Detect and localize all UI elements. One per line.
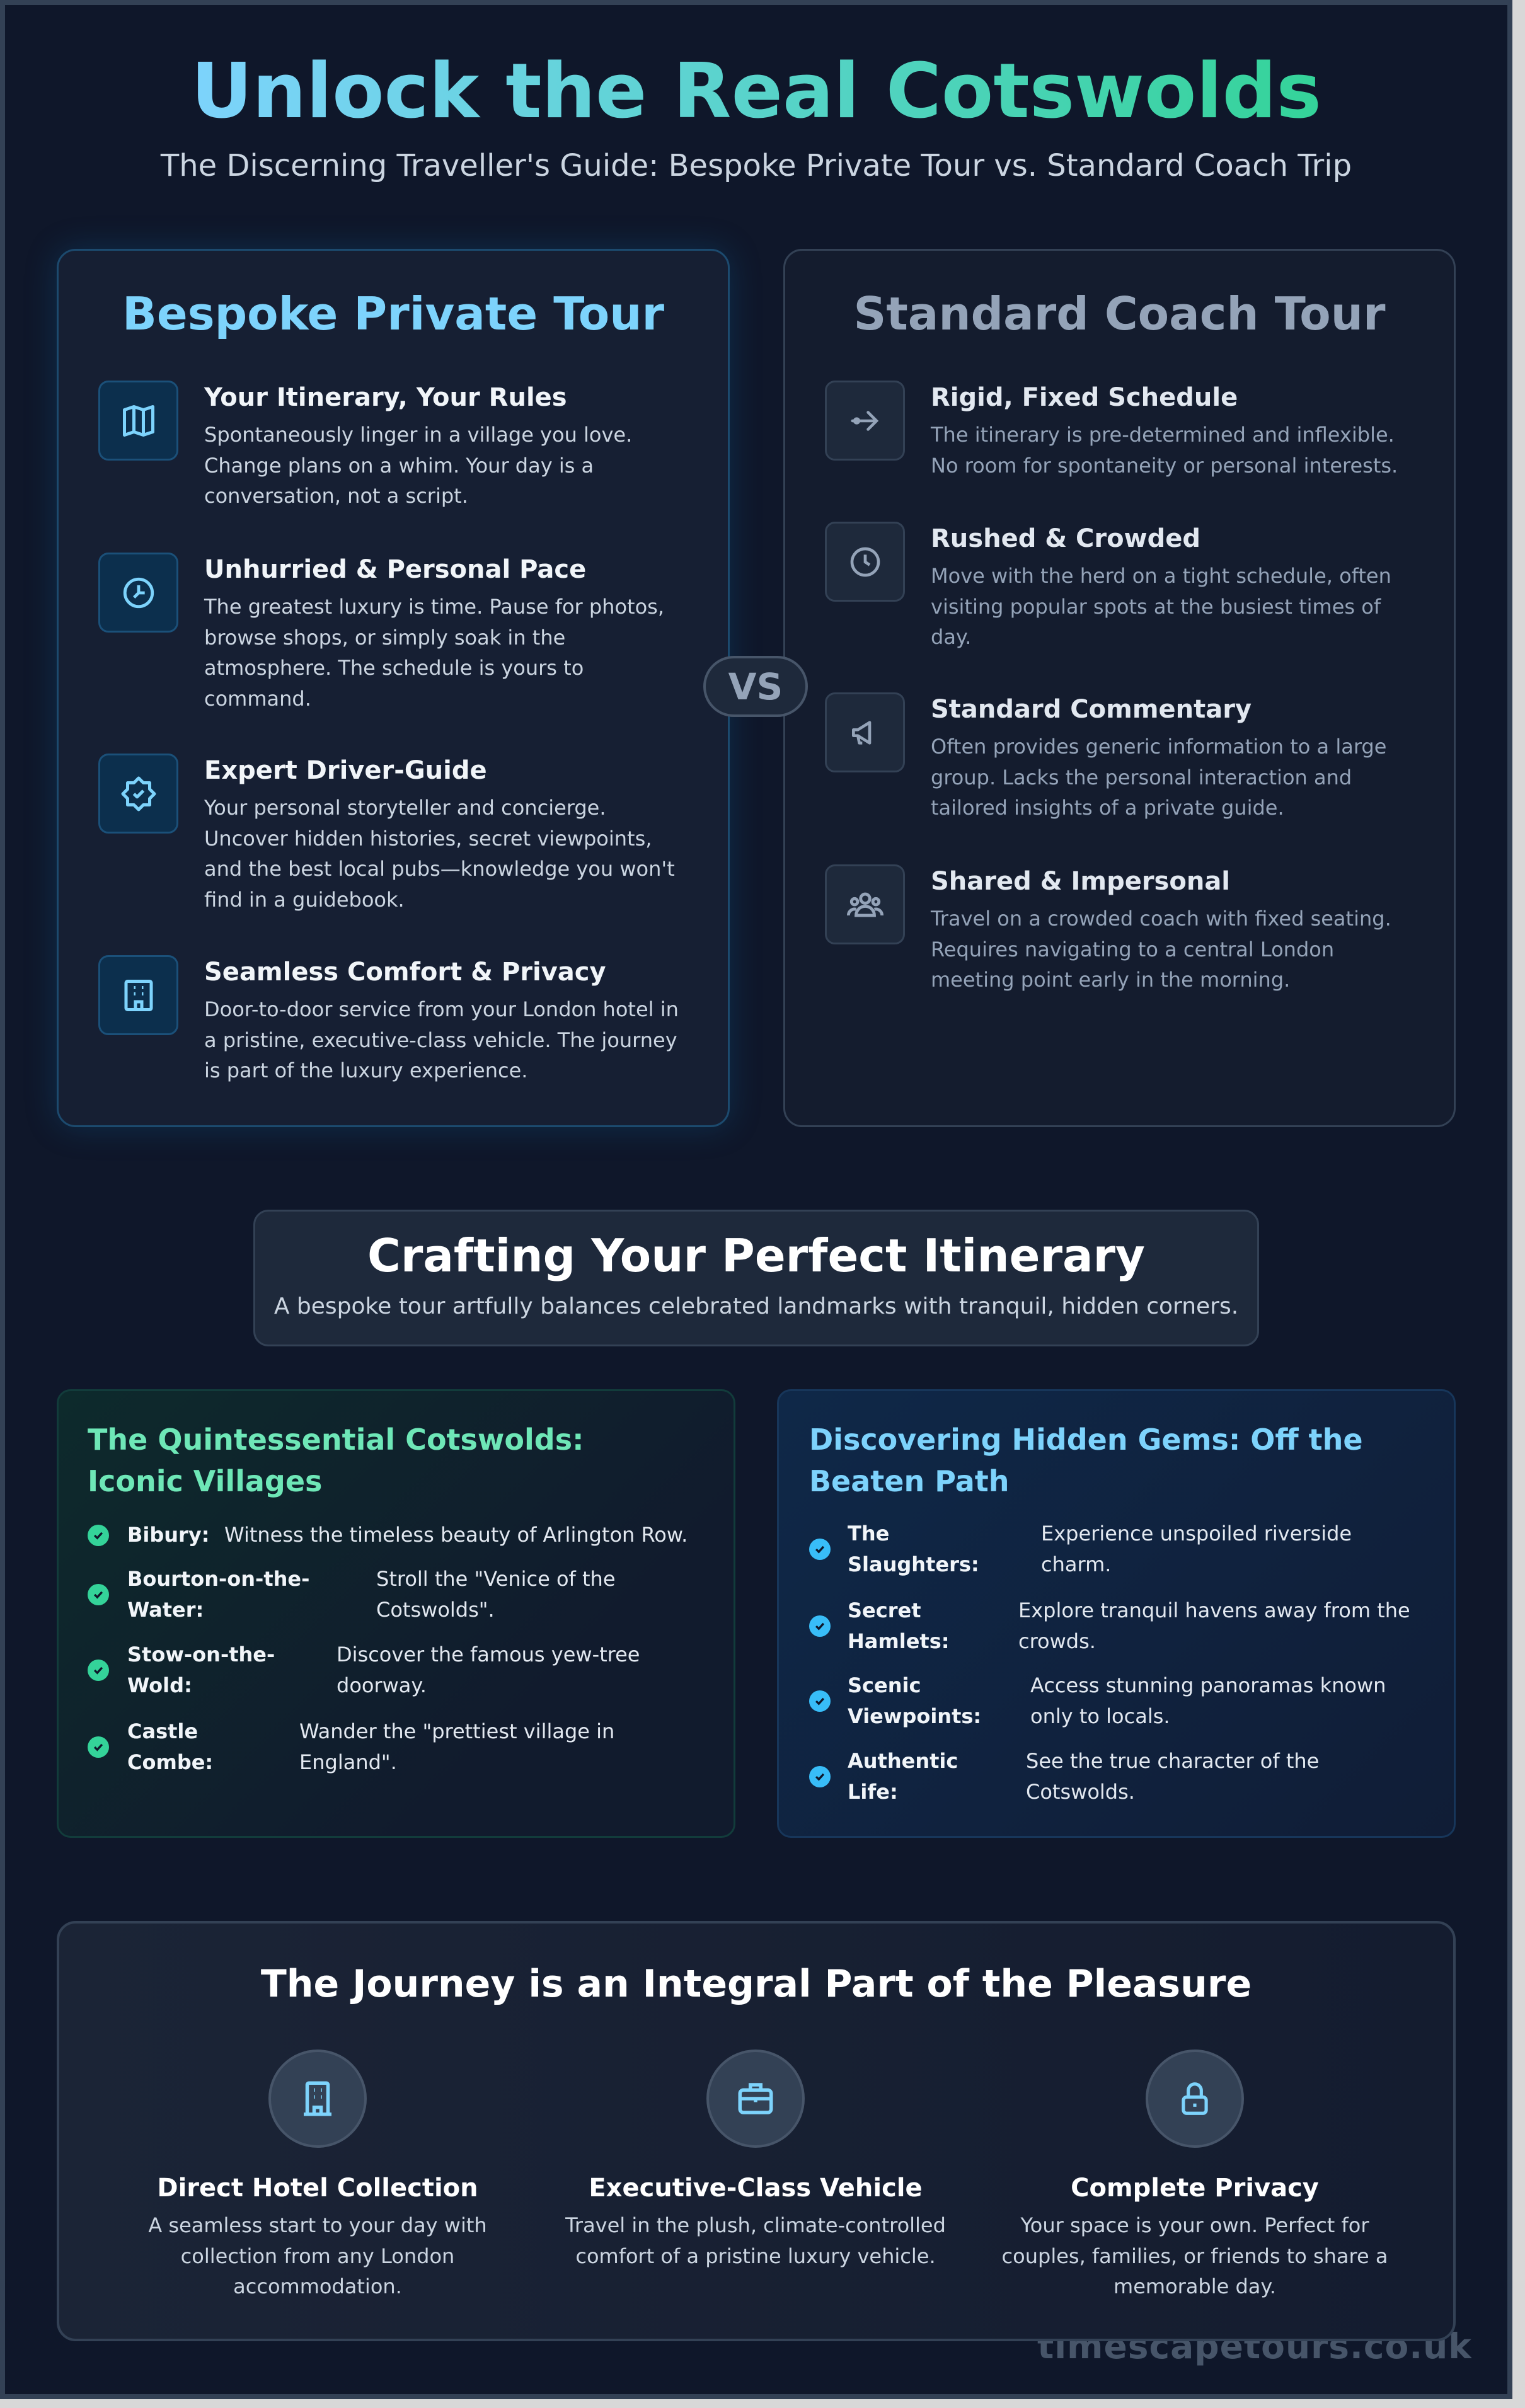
- feature: privacy: Complete Privacy: [1071, 2174, 1319, 2203]
- item: expert guide: find in a guidebook.: [204, 888, 405, 912]
- crafting box: [253, 1210, 1259, 1346]
- gem: slaughters: charm.: [1041, 1552, 1111, 1576]
- feature: vehicle: [565, 2050, 946, 2268]
- icon: building: [268, 2050, 367, 2148]
- gem: hamlets: Explore tranquil havens away from the: [1018, 1598, 1410, 1622]
- village: bourton: [88, 1567, 615, 1622]
- item: comfort privacy: Door-to-door service from your London hotel in: [204, 997, 679, 1021]
- feature: hotel collection: [148, 2050, 487, 2298]
- item: rushed crowded: visiting popular spots at the busiest times of: [931, 595, 1381, 619]
- gem: authentic life: Cotswolds.: [1026, 1780, 1135, 1804]
- subtitle: crafting: A bespoke tour artfully balances celebrated landmarks with tranquil, hidden corners.: [274, 1293, 1238, 1319]
- village: castle combe: Wander the "prettiest village in: [299, 1719, 614, 1743]
- village: bourton: Cotswolds".: [376, 1598, 495, 1622]
- item: expert guide: and the best local pubs—knowledge you won't: [204, 857, 675, 881]
- item: rushed crowded: Move with the herd on a tight schedule, often: [931, 564, 1391, 588]
- gem: hamlets: Hamlets:: [848, 1629, 950, 1653]
- gem: slaughters: [809, 1522, 1352, 1576]
- feature: privacy: memorable day.: [1114, 2274, 1276, 2298]
- heading: iconic villages: Iconic Villages: [88, 1464, 322, 1498]
- gem: viewpoints: Viewpoints:: [848, 1704, 981, 1728]
- item: your itinerary: Change plans on a whim. Your day is a: [204, 454, 594, 478]
- village: bibury: Witness the timeless beauty of Arlington Row.: [224, 1523, 688, 1547]
- item: comfort privacy: a pristine, executive-class vehicle. The journey: [204, 1028, 677, 1052]
- item: unhurried: [98, 553, 664, 711]
- heading: bespoke: Bespoke Private Tour: [122, 287, 664, 340]
- item: rigid schedule: Rigid, Fixed Schedule: [931, 383, 1238, 412]
- item: unhurried: command.: [204, 687, 311, 711]
- feature: hotel collection: collection from any London: [181, 2244, 454, 2268]
- heading: iconic villages: [88, 1423, 584, 1498]
- item: rigid schedule: [825, 381, 1398, 478]
- icon: badge: [98, 754, 178, 834]
- item: comfort privacy: Seamless Comfort & Privacy: [204, 958, 606, 987]
- item: shared impersonal: Shared & Impersonal: [931, 867, 1230, 896]
- item: expert guide: Uncover hidden histories, secret viewpoints,: [204, 827, 652, 851]
- village: castle combe: Combe:: [127, 1750, 213, 1774]
- item: expert guide: Your personal storyteller and concierge.: [204, 796, 606, 820]
- gem: hamlets: crowds.: [1018, 1629, 1096, 1653]
- item: standard commentary: Often provides generic information to a large: [931, 735, 1386, 759]
- panel: standard coach tour: [783, 249, 1456, 1127]
- village: castle combe: [88, 1719, 614, 1774]
- gem: slaughters: Slaughters:: [848, 1552, 979, 1576]
- title: Unlock the Real Cotswolds: [191, 48, 1321, 135]
- card: hidden gems: [777, 1389, 1456, 1838]
- item: standard commentary: tailored insights of a private guide.: [931, 796, 1284, 820]
- feature: privacy: [1002, 2050, 1388, 2298]
- vs badge: [703, 656, 808, 717]
- item: unhurried: atmosphere. The schedule is yours to: [204, 656, 584, 680]
- gem: hamlets: Secret: [848, 1598, 921, 1622]
- item: shared impersonal: [825, 864, 1391, 992]
- village: castle combe: Castle: [127, 1719, 198, 1743]
- heading: journey: The Journey is an Integral Part of the Pleasure: [261, 1962, 1252, 2006]
- icon: briefcase: [706, 2050, 805, 2148]
- feature: hotel collection: accommodation.: [233, 2274, 402, 2298]
- item: rushed crowded: day.: [931, 625, 971, 649]
- feature: vehicle: comfort of a pristine luxury vehicle.: [575, 2244, 936, 2268]
- village: stow: Wold:: [127, 1673, 192, 1697]
- item: rigid schedule: The itinerary is pre-determined and inflexible.: [931, 423, 1395, 447]
- item: your itinerary: Your Itinerary, Your Rules: [204, 383, 567, 412]
- village: bourton: Bourton-on-the-: [127, 1567, 309, 1591]
- heading: hidden gems: Beaten Path: [809, 1464, 1010, 1498]
- feature: vehicle: Travel in the plush, climate-controlled: [565, 2213, 946, 2237]
- gem: authentic life: See the true character of the: [1026, 1749, 1319, 1773]
- feature: vehicle: Executive-Class Vehicle: [589, 2174, 923, 2203]
- icon: clock: [98, 553, 178, 633]
- village: bourton: Stroll the "Venice of the: [376, 1567, 615, 1591]
- icon: route arrow: [825, 381, 905, 461]
- item: shared impersonal: Travel on a crowded coach with fixed seating.: [931, 907, 1391, 931]
- item: rushed crowded: Rushed & Crowded: [931, 524, 1200, 553]
- village: stow: Discover the famous yew-tree: [337, 1643, 640, 1666]
- item: your itinerary: conversation, not a script.: [204, 484, 468, 508]
- gem: viewpoints: [809, 1673, 1386, 1728]
- village: stow: Stow-on-the-: [127, 1643, 275, 1666]
- subtitle: The Discerning Traveller's Guide: Bespoke Private Tour vs. Standard Coach Trip: [161, 148, 1352, 183]
- item: unhurried: Unhurried & Personal Pace: [204, 555, 586, 584]
- feature: privacy: Your space is your own. Perfect for: [1020, 2213, 1369, 2237]
- gem: authentic life: Authentic: [848, 1749, 958, 1773]
- item: shared impersonal: meeting point early in the morning.: [931, 968, 1290, 992]
- heading: hidden gems: Discovering Hidden Gems: Off the: [809, 1423, 1363, 1457]
- item: unhurried: browse shops, or simply soak in the: [204, 626, 565, 650]
- watermark: timescapetours.co.uk: [1037, 2326, 1472, 2366]
- gem: hamlets: [809, 1598, 1410, 1653]
- vs badge: VS: [728, 665, 783, 708]
- village: bibury: Bibury:: [127, 1523, 209, 1547]
- heading: crafting: Crafting Your Perfect Itinerary: [367, 1229, 1145, 1282]
- icon: megaphone: [825, 692, 905, 772]
- gem: viewpoints: only to locals.: [1030, 1704, 1170, 1728]
- gem: authentic life: Life:: [848, 1780, 898, 1804]
- item: expert guide: [98, 754, 675, 912]
- item: expert guide: Expert Driver-Guide: [204, 756, 487, 785]
- item: unhurried: The greatest luxury is time. Pause for photos,: [204, 595, 664, 619]
- item: rushed crowded: [825, 522, 1391, 649]
- icon: clock arrows: [825, 522, 905, 602]
- heading: standard: Standard Coach Tour: [853, 287, 1386, 340]
- icon: map: [98, 381, 178, 461]
- item: your itinerary: Spontaneously linger in a village you love.: [204, 423, 632, 447]
- icon: people: [825, 864, 905, 944]
- gem: slaughters: Experience unspoiled riverside: [1041, 1522, 1352, 1545]
- village: castle combe: England".: [299, 1750, 397, 1774]
- panel: bespoke private tour: [57, 249, 730, 1127]
- feature: privacy: couples, families, or friends to share a: [1002, 2244, 1388, 2268]
- icon: lock: [1146, 2050, 1244, 2148]
- heading: iconic villages: The Quintessential Cotswolds:: [88, 1423, 584, 1457]
- item: comfort privacy: [98, 955, 679, 1082]
- village: stow: [88, 1643, 640, 1697]
- village: bourton: Water:: [127, 1598, 204, 1622]
- card: iconic villages: [57, 1389, 735, 1838]
- gem: authentic life: [809, 1749, 1319, 1804]
- item: standard commentary: [825, 692, 1386, 820]
- village: stow: doorway.: [337, 1673, 427, 1697]
- gem: viewpoints: Scenic: [848, 1673, 921, 1697]
- feature: hotel collection: Direct Hotel Collection: [157, 2174, 478, 2203]
- item: rigid schedule: No room for spontaneity or personal interests.: [931, 454, 1398, 478]
- feature: hotel collection: A seamless start to your day with: [148, 2213, 487, 2237]
- icon: hotel: [98, 955, 178, 1035]
- panel: journey: [57, 1921, 1456, 2341]
- heading: hidden gems: [809, 1423, 1363, 1498]
- gem: viewpoints: Access stunning panoramas known: [1030, 1673, 1386, 1697]
- item: standard commentary: group. Lacks the personal interaction and: [931, 765, 1352, 789]
- item: your itinerary: [98, 381, 632, 508]
- gem: slaughters: The: [848, 1522, 889, 1545]
- item: standard commentary: Standard Commentary: [931, 695, 1252, 724]
- item: comfort privacy: is part of the luxury experience.: [204, 1058, 527, 1082]
- item: shared impersonal: Requires navigating to a central London: [931, 937, 1334, 961]
